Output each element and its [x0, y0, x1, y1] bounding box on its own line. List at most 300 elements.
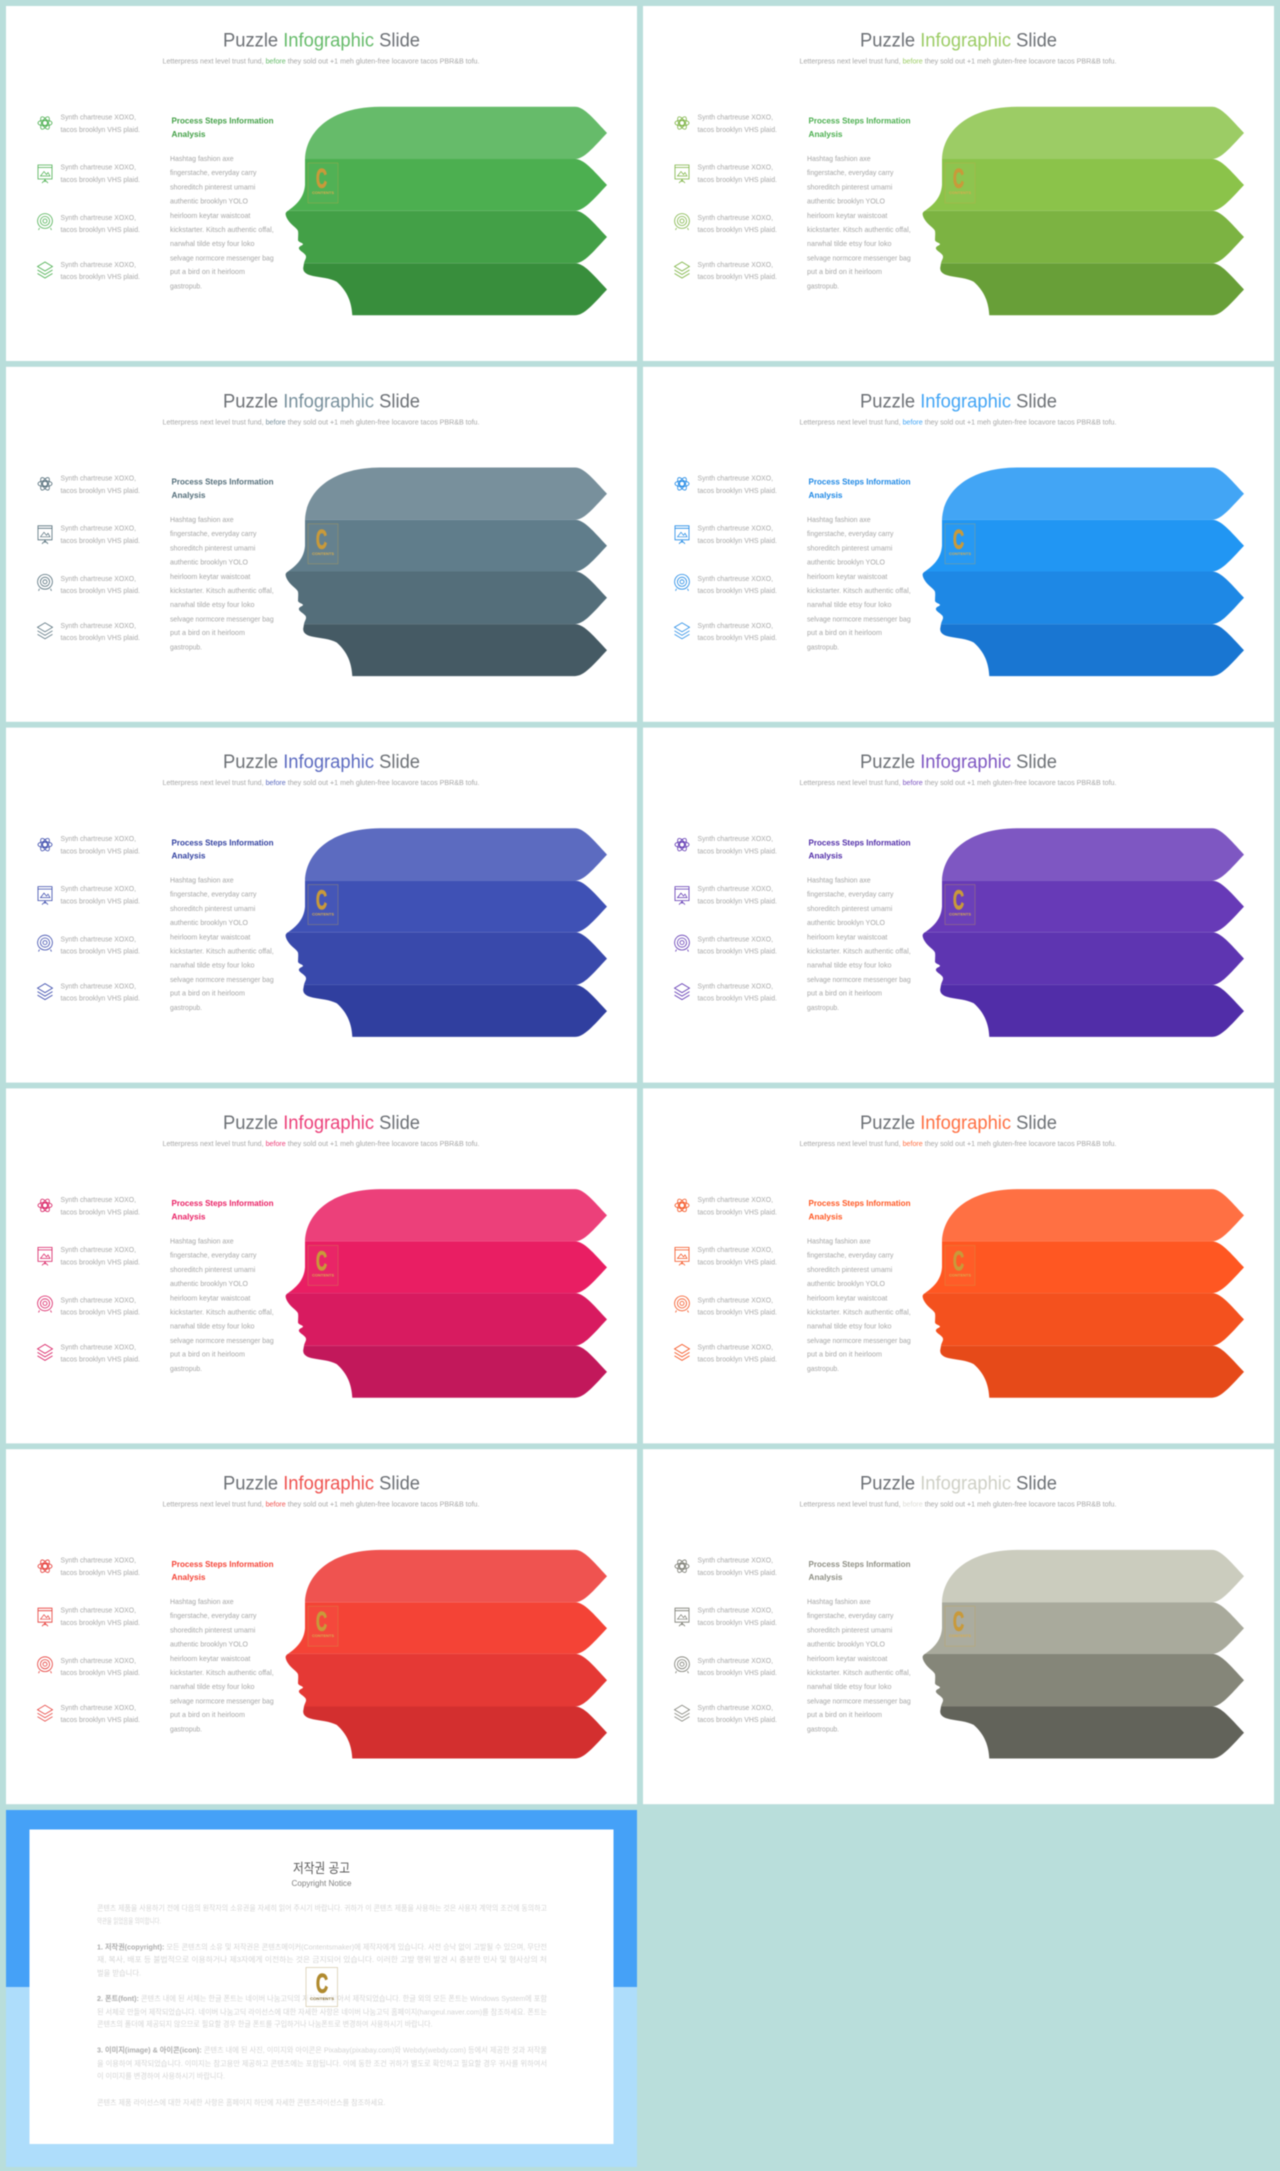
- item text 1: Synth chartreuse XOXO,: [60, 473, 136, 482]
- heading: Analysis: [808, 129, 843, 139]
- body text: shoreditch pinterest umami: [807, 904, 893, 913]
- item text 1: Synth chartreuse XOXO,: [60, 112, 136, 122]
- body text: Hashtag fashion axe: [170, 154, 234, 163]
- logo watermark: CONTENTS: [312, 1273, 335, 1277]
- body text: selvage normcore messenger bag: [170, 254, 274, 262]
- body text: narwhal tilde etsy four loko: [807, 239, 892, 248]
- heading: [172, 1559, 274, 1582]
- heading: [808, 476, 910, 500]
- item text 1: [698, 1556, 777, 1577]
- body text: gastropub.: [170, 1003, 202, 1012]
- item text 4: Synth chartreuse XOXO,: [698, 260, 773, 269]
- item text 1: [698, 1195, 777, 1216]
- icon: layers: [674, 1344, 690, 1360]
- item text 2: tacos brooklyn VHS plaid.: [60, 536, 140, 545]
- body text: gastropub.: [170, 1725, 202, 1734]
- body text: selvage normcore messenger bag: [170, 1697, 274, 1706]
- item text 4: Synth chartreuse XOXO,: [698, 1703, 773, 1712]
- item text 1: [698, 834, 777, 856]
- slide background: [643, 6, 1274, 361]
- item text 4: Synth chartreuse XOXO,: [698, 1342, 773, 1351]
- notice title: 저작권 공고: [293, 1861, 350, 1876]
- heading: Analysis: [808, 1572, 843, 1582]
- heading: Process Steps Information: [808, 476, 910, 486]
- item text 4: [698, 982, 777, 1003]
- item text 1: tacos brooklyn VHS plaid.: [698, 486, 777, 495]
- heading: Process Steps Information: [172, 116, 274, 126]
- item text 3: [60, 213, 140, 234]
- logo watermark: C: [953, 885, 964, 915]
- item text 4: [60, 1342, 140, 1363]
- item text 2: Synth chartreuse XOXO,: [698, 523, 773, 532]
- slide background: [6, 728, 637, 1083]
- body text: selvage normcore messenger bag: [807, 1336, 911, 1345]
- icon: layers: [38, 984, 52, 1000]
- head arrow bands: [923, 1189, 1244, 1398]
- item text 3: tacos brooklyn VHS plaid.: [698, 947, 777, 956]
- body text: heirloom keytar waistcoat: [807, 572, 888, 581]
- body text: shoreditch pinterest umami: [807, 182, 893, 192]
- item text 3: Synth chartreuse XOXO,: [60, 213, 136, 222]
- icon: target: [675, 574, 689, 591]
- body text: narwhal tilde etsy four loko: [170, 961, 254, 970]
- panel: copyright notice: [6, 1810, 637, 2167]
- item text 3: Synth chartreuse XOXO,: [698, 213, 773, 222]
- subtitle: Letterpress next level trust fund, before they sold out +1 meh gluten-free locavore tacos PBR&B tofu.: [162, 1500, 480, 1509]
- panel: green slide: [6, 6, 637, 361]
- item text 3: tacos brooklyn VHS plaid.: [698, 1668, 777, 1677]
- logo watermark: [945, 1245, 975, 1285]
- body text: gastropub.: [807, 1364, 839, 1373]
- body text: selvage normcore messenger bag: [170, 614, 274, 623]
- body text: fingerstache, everyday carry: [807, 1250, 894, 1259]
- item text 1: Synth chartreuse XOXO,: [698, 834, 773, 843]
- item text 2: [60, 523, 140, 545]
- body text: shoreditch pinterest umami: [170, 543, 256, 552]
- item text 4: [60, 621, 140, 642]
- item text 2: [60, 884, 140, 906]
- item text 3: tacos brooklyn VHS plaid.: [60, 1307, 140, 1316]
- item text 2: tacos brooklyn VHS plaid.: [60, 175, 140, 184]
- icon: layers: [674, 262, 690, 278]
- body text: kickstarter. Kitsch authentic offal,: [807, 1307, 911, 1316]
- item text 3: [60, 574, 140, 595]
- copyright paragraph: 재, 복사, 배포 등 불법적으로 이용하거나 제3자에게 이전하는 것은 금지되어 있습니다. 이러한 고발 행위 발견 시 충분한 민사 및 형사상의 처: [97, 1954, 547, 1964]
- logo watermark: C: [953, 164, 964, 194]
- icon: target: [38, 1296, 52, 1312]
- body text: selvage normcore messenger bag: [807, 254, 911, 262]
- intro paragraph: [97, 1902, 547, 1926]
- logo watermark: CONTENTS: [312, 191, 335, 195]
- head arrow bands: [923, 1550, 1244, 1758]
- item text 3: Synth chartreuse XOXO,: [698, 1295, 773, 1304]
- icon: target: [38, 1657, 52, 1673]
- panel: blue slide: [643, 367, 1274, 722]
- item text 3: tacos brooklyn VHS plaid.: [698, 225, 777, 234]
- item text 1: tacos brooklyn VHS plaid.: [60, 486, 140, 495]
- font paragraph: 2. 폰트(font): 콘텐츠 내에 된 서체는 한글 폰트는 네이버 나눔고딕의 저작권을 받아서 제작되었습니다. 한글 외의 모든 폰트는 Windows System에 포함: [97, 1993, 547, 2003]
- item text 2: Synth chartreuse XOXO,: [60, 1606, 136, 1615]
- title: Puzzle Infographic Slide: [223, 1474, 420, 1495]
- body text: [170, 1597, 274, 1734]
- body text: [807, 154, 911, 290]
- item text 2: tacos brooklyn VHS plaid.: [60, 1257, 140, 1266]
- subtitle: Letterpress next level trust fund, before they sold out +1 meh gluten-free locavore tacos PBR&B tofu.: [800, 56, 1116, 66]
- body text: kickstarter. Kitsch authentic offal,: [170, 586, 274, 595]
- item text 4: tacos brooklyn VHS plaid.: [60, 1715, 140, 1724]
- item text 2: Synth chartreuse XOXO,: [60, 523, 136, 532]
- body text: shoreditch pinterest umami: [807, 1265, 893, 1274]
- body text: fingerstache, everyday carry: [807, 890, 894, 899]
- item text 1: Synth chartreuse XOXO,: [698, 1556, 773, 1565]
- license note: 콘텐츠 제품 라이선스에 대한 자세한 사항은 홈페이지 하단에 자세한 콘텐츠라이선스를 참조하세요.: [97, 2097, 386, 2107]
- head arrow bands: [923, 468, 1244, 676]
- icon: presentation board: [675, 1247, 689, 1265]
- item text 1: tacos brooklyn VHS plaid.: [698, 847, 777, 856]
- body text: selvage normcore messenger bag: [807, 1697, 911, 1706]
- icon: atom flower: [38, 1198, 52, 1213]
- body text: put a bird on it heirloom: [807, 628, 882, 637]
- logo watermark: [308, 1606, 338, 1646]
- body text: fingerstache, everyday carry: [170, 1250, 257, 1259]
- body text: narwhal tilde etsy four loko: [807, 1321, 892, 1330]
- body text: [807, 515, 911, 651]
- item text 4: Synth chartreuse XOXO,: [60, 982, 136, 991]
- subtitle: Letterpress next level trust fund, before they sold out +1 meh gluten-free locavore tacos PBR&B tofu.: [800, 778, 1116, 787]
- item text 4: tacos brooklyn VHS plaid.: [60, 633, 140, 642]
- icon: atom flower: [675, 1198, 689, 1213]
- body text: Hashtag fashion axe: [807, 876, 871, 885]
- panel: light green slide: [643, 6, 1274, 361]
- logo watermark: [308, 885, 338, 925]
- item text 2: Synth chartreuse XOXO,: [60, 162, 136, 172]
- heading: [172, 837, 274, 861]
- slide background: [643, 728, 1274, 1083]
- logo watermark: CONTENTS: [949, 191, 972, 195]
- body text: heirloom keytar waistcoat: [807, 211, 888, 220]
- slide background: [643, 367, 1274, 722]
- body text: put a bird on it heirloom: [807, 1349, 882, 1358]
- icon: presentation board: [675, 1608, 689, 1626]
- item text 4: Synth chartreuse XOXO,: [698, 621, 773, 630]
- font paragraph: [97, 1993, 547, 2028]
- body text: Hashtag fashion axe: [807, 154, 871, 163]
- item text 3: Synth chartreuse XOXO,: [60, 935, 136, 944]
- body text: Hashtag fashion axe: [807, 515, 871, 524]
- body text: Hashtag fashion axe: [170, 1597, 234, 1606]
- item text 4: tacos brooklyn VHS plaid.: [698, 994, 777, 1003]
- icon: atom flower: [38, 837, 52, 852]
- item text 1: [698, 473, 777, 495]
- logo watermark: [308, 1245, 338, 1285]
- title: Puzzle Infographic Slide: [860, 752, 1057, 773]
- item text 2: Synth chartreuse XOXO,: [698, 162, 773, 172]
- item text 2: Synth chartreuse XOXO,: [60, 884, 136, 893]
- body text: put a bird on it heirloom: [807, 989, 882, 998]
- item text 4: [60, 260, 140, 281]
- head arrow bands: [923, 828, 1244, 1037]
- item text 1: Synth chartreuse XOXO,: [698, 112, 773, 122]
- item text 2: Synth chartreuse XOXO,: [60, 1245, 136, 1254]
- heading: [808, 837, 910, 861]
- item text 3: Synth chartreuse XOXO,: [60, 574, 136, 583]
- body text: authentic brooklyn YOLO: [807, 918, 885, 927]
- body text: selvage normcore messenger bag: [807, 975, 911, 984]
- heading: [172, 476, 274, 500]
- item text 2: tacos brooklyn VHS plaid.: [60, 1618, 140, 1627]
- item text 4: Synth chartreuse XOXO,: [698, 982, 773, 991]
- title: Puzzle Infographic Slide: [223, 752, 420, 773]
- body text: heirloom keytar waistcoat: [807, 933, 888, 942]
- body text: [170, 876, 274, 1012]
- body text: gastropub.: [807, 282, 839, 290]
- subtitle: Letterpress next level trust fund, before they sold out +1 meh gluten-free locavore tacos PBR&B tofu.: [800, 1139, 1116, 1148]
- heading: Process Steps Information: [172, 837, 274, 847]
- item text 2: [60, 162, 140, 184]
- body text: heirloom keytar waistcoat: [170, 933, 251, 942]
- item text 2: tacos brooklyn VHS plaid.: [698, 536, 777, 545]
- heading: Analysis: [172, 1572, 206, 1582]
- item text 4: [60, 982, 140, 1003]
- body text: put a bird on it heirloom: [170, 267, 245, 276]
- light blue backdrop bottom: [6, 1987, 637, 2167]
- body text: shoreditch pinterest umami: [807, 1626, 893, 1635]
- body text: narwhal tilde etsy four loko: [170, 600, 254, 609]
- body text: gastropub.: [170, 282, 202, 290]
- item text 4: Synth chartreuse XOXO,: [60, 1342, 136, 1351]
- item text 2: [698, 162, 777, 184]
- logo watermark: C: [953, 1246, 964, 1276]
- icon: target: [38, 214, 52, 230]
- item text 2: [698, 884, 777, 906]
- logo watermark: [945, 1606, 975, 1646]
- item text 2: [698, 1245, 777, 1266]
- heading: [172, 116, 274, 139]
- item text 3: tacos brooklyn VHS plaid.: [60, 586, 140, 595]
- item text 1: [698, 112, 777, 134]
- item text 3: tacos brooklyn VHS plaid.: [60, 225, 140, 234]
- item text 4: Synth chartreuse XOXO,: [60, 1703, 136, 1712]
- item text 1: [60, 834, 140, 856]
- icon: presentation board: [675, 887, 689, 905]
- body text: kickstarter. Kitsch authentic offal,: [170, 947, 274, 956]
- icon: atom flower: [675, 837, 689, 852]
- icon: atom flower: [38, 115, 52, 131]
- intro paragraph: 콘텐츠 제품을 사용하기 전에 다음의 원작자의 소유권을 자세히 읽어 주시기 바랍니다. 귀하가 이 콘텐츠 제품을 사용하는 것은 사용자 계약의 조건에 동의하고: [97, 1902, 547, 1912]
- slide background: [6, 1088, 637, 1443]
- image and icon paragraph: 이 이미지를 변경하여 사용하시기 바랍니다.: [97, 2070, 225, 2080]
- item text 1: [60, 112, 140, 134]
- item text 1: [60, 1195, 140, 1216]
- item text 4: [698, 1703, 777, 1724]
- subtitle: Letterpress next level trust fund, before they sold out +1 meh gluten-free locavore tacos PBR&B tofu.: [162, 417, 480, 426]
- item text 4: tacos brooklyn VHS plaid.: [60, 272, 140, 281]
- copyright paragraph: 벌을 받습니다.: [97, 1968, 141, 1978]
- item text 3: Synth chartreuse XOXO,: [60, 1656, 136, 1665]
- logo watermark: C: [316, 1607, 327, 1637]
- copyright paragraph: [97, 1942, 547, 1978]
- icon: atom flower: [675, 476, 689, 491]
- logo watermark: [308, 163, 338, 203]
- heading: Analysis: [808, 1211, 843, 1221]
- body text: gastropub.: [170, 1364, 202, 1373]
- heading: Process Steps Information: [808, 837, 910, 847]
- logo watermark: CONTENTS: [310, 1997, 335, 2001]
- body text: heirloom keytar waistcoat: [170, 1654, 251, 1663]
- body text: authentic brooklyn YOLO: [807, 196, 885, 206]
- head arrow bands: [286, 107, 607, 315]
- icon: layers: [674, 623, 690, 639]
- logo watermark: [945, 524, 975, 564]
- blue backdrop top: [6, 1810, 637, 1987]
- notice subtitle: Copyright Notice: [292, 1878, 352, 1888]
- body text: narwhal tilde etsy four loko: [170, 1321, 254, 1330]
- body text: shoreditch pinterest umami: [807, 543, 893, 552]
- item text 1: tacos brooklyn VHS plaid.: [60, 125, 140, 134]
- item text 2: tacos brooklyn VHS plaid.: [698, 1257, 777, 1266]
- body text: authentic brooklyn YOLO: [170, 196, 248, 206]
- title: Puzzle Infographic Slide: [860, 30, 1057, 52]
- item text 4: [698, 1342, 777, 1363]
- item text 4: [698, 260, 777, 281]
- body text: heirloom keytar waistcoat: [170, 1293, 251, 1302]
- icon: target: [38, 574, 52, 591]
- icon: presentation board: [675, 526, 689, 544]
- subtitle: Letterpress next level trust fund, before they sold out +1 meh gluten-free locavore tacos PBR&B tofu.: [800, 417, 1116, 426]
- item text 2: Synth chartreuse XOXO,: [698, 884, 773, 893]
- item text 1: tacos brooklyn VHS plaid.: [60, 1568, 140, 1577]
- title: Puzzle Infographic Slide: [223, 391, 420, 412]
- item text 3: [698, 1656, 777, 1677]
- body text: Hashtag fashion axe: [170, 876, 234, 885]
- heading: Process Steps Information: [172, 1198, 274, 1208]
- heading: Process Steps Information: [172, 476, 274, 486]
- item text 3: [698, 935, 777, 956]
- title: Puzzle Infographic Slide: [223, 30, 420, 52]
- font paragraph: 된 서체로 만들어 제작되었습니다. 네이버 나눔고딕 라이선스에 대한 자세한 사항은 네이버 나눔고딕 홈페이지(hangeul.naver.com)를 참조하세요. 폰트는: [97, 2006, 547, 2016]
- panel: red slide: [6, 1449, 637, 1804]
- item text 3: [60, 935, 140, 956]
- icon: presentation board: [38, 1247, 52, 1265]
- body text: put a bird on it heirloom: [807, 1710, 882, 1719]
- item text 4: tacos brooklyn VHS plaid.: [698, 633, 777, 642]
- item text 3: [60, 1656, 140, 1677]
- body text: kickstarter. Kitsch authentic offal,: [807, 586, 911, 595]
- title: Puzzle Infographic Slide: [860, 1474, 1057, 1495]
- body text: narwhal tilde etsy four loko: [807, 961, 892, 970]
- body text: gastropub.: [807, 1725, 839, 1734]
- panel: deep orange slide: [643, 1088, 1274, 1443]
- item text 2: tacos brooklyn VHS plaid.: [60, 897, 140, 906]
- logo watermark: [308, 524, 338, 564]
- body text: selvage normcore messenger bag: [807, 614, 911, 623]
- body text: Hashtag fashion axe: [807, 1597, 871, 1606]
- logo watermark: CONTENTS: [949, 1634, 972, 1638]
- heading: Analysis: [172, 1211, 206, 1221]
- body text: kickstarter. Kitsch authentic offal,: [807, 1668, 911, 1677]
- panel: blue grey slide: [6, 367, 637, 722]
- body text: [170, 1236, 274, 1373]
- subtitle: Letterpress next level trust fund, before they sold out +1 meh gluten-free locavore tacos PBR&B tofu.: [162, 778, 480, 787]
- logo watermark: CONTENTS: [949, 1273, 972, 1277]
- heading: Analysis: [172, 490, 206, 500]
- icon: presentation board: [38, 887, 52, 905]
- body text: narwhal tilde etsy four loko: [807, 600, 892, 609]
- panel: deep purple slide: [643, 728, 1274, 1083]
- logo watermark: CONTENTS: [312, 913, 335, 917]
- body text: heirloom keytar waistcoat: [170, 211, 251, 220]
- body text: authentic brooklyn YOLO: [807, 557, 885, 566]
- head arrow bands: [286, 468, 607, 676]
- body text: kickstarter. Kitsch authentic offal,: [807, 225, 911, 234]
- body text: selvage normcore messenger bag: [170, 975, 274, 984]
- icon: layers: [38, 1705, 52, 1721]
- body text: put a bird on it heirloom: [170, 1349, 245, 1358]
- subtitle: Letterpress next level trust fund, before they sold out +1 meh gluten-free locavore tacos PBR&B tofu.: [162, 56, 480, 66]
- image and icon paragraph: 을 이용하여 제작되었습니다. 이미지는 참고용만 제공하고 콘텐츠에는 포함됩니다. 이에 동한 조건 귀하가 별도로 확인하고 필요할 경우 귀사를 위하여서: [97, 2058, 547, 2068]
- body text: gastropub.: [170, 642, 202, 651]
- heading: [808, 1559, 910, 1582]
- item text 1: Synth chartreuse XOXO,: [60, 834, 136, 843]
- item text 3: Synth chartreuse XOXO,: [698, 1656, 773, 1665]
- icon: target: [675, 935, 689, 952]
- logo watermark: [306, 1968, 338, 2006]
- item text 4: [60, 1703, 140, 1724]
- logo watermark: CONTENTS: [312, 552, 335, 556]
- logo watermark: CONTENTS: [949, 552, 972, 556]
- item text 2: tacos brooklyn VHS plaid.: [698, 897, 777, 906]
- body text: Hashtag fashion axe: [170, 1236, 234, 1245]
- item text 4: Synth chartreuse XOXO,: [60, 260, 136, 269]
- item text 1: tacos brooklyn VHS plaid.: [698, 1568, 777, 1577]
- item text 1: tacos brooklyn VHS plaid.: [698, 125, 777, 134]
- heading: Process Steps Information: [808, 116, 910, 126]
- body text: Hashtag fashion axe: [807, 1236, 871, 1245]
- logo watermark: C: [316, 1968, 328, 1998]
- body text: heirloom keytar waistcoat: [170, 572, 251, 581]
- icon: atom flower: [38, 1559, 52, 1574]
- icon: atom flower: [38, 476, 52, 491]
- body text: put a bird on it heirloom: [170, 628, 245, 637]
- slide background: [6, 6, 637, 361]
- icon: layers: [674, 1705, 690, 1721]
- item text 1: Synth chartreuse XOXO,: [60, 1556, 136, 1565]
- body text: narwhal tilde etsy four loko: [170, 1682, 254, 1691]
- icon: presentation board: [38, 1608, 52, 1626]
- body text: fingerstache, everyday carry: [807, 529, 894, 538]
- logo watermark: CONTENTS: [312, 1634, 335, 1638]
- item text 3: tacos brooklyn VHS plaid.: [698, 1307, 777, 1316]
- item text 1: Synth chartreuse XOXO,: [60, 1195, 136, 1204]
- body text: [807, 1236, 911, 1373]
- item text 4: tacos brooklyn VHS plaid.: [698, 272, 777, 281]
- body text: fingerstache, everyday carry: [170, 168, 257, 177]
- body text: fingerstache, everyday carry: [170, 1611, 257, 1620]
- item text 4: Synth chartreuse XOXO,: [60, 621, 136, 630]
- heading: Analysis: [808, 851, 843, 861]
- body text: fingerstache, everyday carry: [170, 890, 257, 899]
- body text: authentic brooklyn YOLO: [170, 918, 248, 927]
- icon: layers: [38, 623, 52, 639]
- head arrow bands: [286, 828, 607, 1037]
- notice card: [30, 1830, 614, 2144]
- item text 2: tacos brooklyn VHS plaid.: [698, 175, 777, 184]
- item text 2: Synth chartreuse XOXO,: [698, 1606, 773, 1615]
- body text: kickstarter. Kitsch authentic offal,: [807, 947, 911, 956]
- item text 3: [698, 574, 777, 595]
- body text: kickstarter. Kitsch authentic offal,: [170, 225, 274, 234]
- item text 1: Synth chartreuse XOXO,: [698, 1195, 773, 1204]
